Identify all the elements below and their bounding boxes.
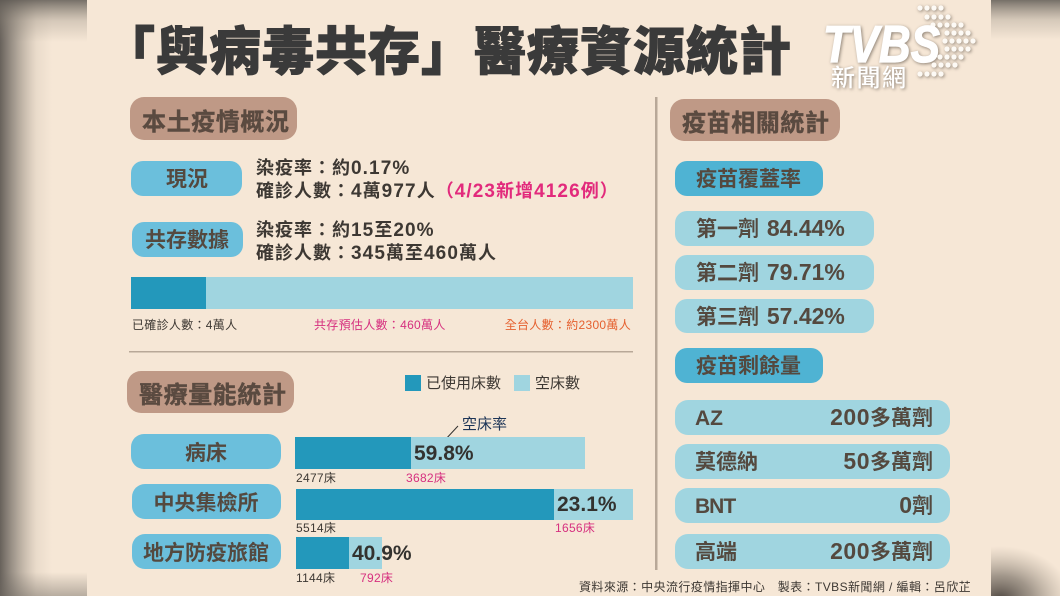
status text: 染疫率：約0.17% bbox=[256, 157, 410, 179]
row: local quarantine hotels: 1144床 bbox=[296, 571, 335, 585]
row: local quarantine hotels: 地方防疫旅館 bbox=[143, 541, 269, 565]
logo wordmark: TVBS bbox=[823, 16, 940, 74]
dose 1 coverage: 第一劑 84.44% bbox=[696, 215, 845, 241]
row: hospital beds: 病床 bbox=[185, 441, 227, 465]
row: local quarantine hotels bbox=[132, 534, 412, 585]
coexistence text bbox=[256, 219, 497, 264]
title: 「與病毒共存」醫療資源統計 bbox=[103, 10, 792, 85]
heading: medical capacity: 醫療量能統計 bbox=[139, 382, 287, 409]
Medigen stock bbox=[675, 534, 950, 569]
logo: TVBS news bbox=[823, 5, 976, 93]
coexistence text: 確診人數：345萬至460萬人 bbox=[256, 242, 497, 264]
BNT stock bbox=[675, 488, 950, 523]
AZ stock: 200多萬劑 bbox=[830, 404, 933, 430]
Medigen stock: 高端 bbox=[695, 540, 737, 564]
status label bbox=[131, 161, 242, 196]
panel: local epidemic overview bbox=[130, 97, 633, 332]
status text bbox=[256, 157, 619, 202]
row: hospital beds: 2477床 bbox=[296, 471, 336, 485]
Moderna stock bbox=[675, 444, 950, 479]
row: local quarantine hotels: 792床 bbox=[360, 571, 393, 585]
Moderna stock: 50多萬劑 bbox=[843, 448, 933, 474]
legend bbox=[405, 375, 580, 392]
Medigen stock: 200多萬劑 bbox=[830, 538, 933, 564]
dose 3 coverage bbox=[675, 299, 874, 333]
row: central quarantine centres: 5514床 bbox=[296, 521, 336, 535]
row: local quarantine hotels: 40.9% bbox=[352, 542, 412, 565]
AZ stock bbox=[675, 400, 950, 435]
source footer: 資料來源：中央流行疫情指揮中心 製表：TVBS新聞網 / 編輯：呂欣芷 bbox=[579, 579, 971, 594]
bar caption: projected: 共存預估人數：460萬人 bbox=[314, 318, 446, 332]
row: hospital beds: 3682床 bbox=[406, 471, 446, 485]
status label: 現況 bbox=[166, 168, 208, 191]
dose 2 coverage: 第二劑 79.71% bbox=[696, 259, 845, 285]
dose 2 coverage bbox=[675, 255, 874, 290]
subheading: coverage: 疫苗覆蓋率 bbox=[696, 168, 801, 191]
heading: medical capacity bbox=[127, 371, 294, 413]
legend: 空床數 bbox=[535, 375, 580, 392]
row: central quarantine centres bbox=[132, 484, 633, 535]
subheading: coverage bbox=[675, 161, 823, 196]
dose 3 coverage: 第三劑 57.42% bbox=[696, 303, 845, 329]
coexistence label: 共存數據 bbox=[145, 229, 229, 252]
BNT stock: BNT bbox=[695, 495, 736, 518]
logo dots arrow bbox=[917, 5, 976, 77]
legend: 已使用床數 bbox=[426, 375, 501, 392]
subheading: remaining: 疫苗剩餘量 bbox=[696, 354, 801, 378]
subheading: remaining bbox=[675, 348, 823, 383]
status text: 確診人數：4萬977人（4/23新增4126例） bbox=[256, 180, 619, 202]
panel: vaccine statistics bbox=[670, 99, 950, 569]
heading: vaccine stats bbox=[670, 99, 840, 141]
right blurred margin bbox=[991, 0, 1060, 596]
heading: vaccine stats: 疫苗相關統計 bbox=[682, 110, 830, 137]
heading: local epidemic bbox=[130, 97, 297, 140]
callout: vacancy rate bbox=[444, 416, 507, 440]
Moderna stock: 莫德納 bbox=[695, 451, 758, 474]
left blurred margin bbox=[0, 0, 87, 596]
logo subtitle: 新聞網 bbox=[831, 58, 908, 93]
row: hospital beds bbox=[131, 434, 585, 485]
bar caption: confirmed: 已確診人數：4萬人 bbox=[132, 317, 237, 332]
callout: vacancy rate: 空床率 bbox=[462, 416, 507, 433]
heading: local epidemic: 本土疫情概況 bbox=[142, 109, 290, 136]
row: central quarantine centres: 1656床 bbox=[555, 521, 595, 535]
row: central quarantine centres: 23.1% bbox=[557, 493, 617, 516]
row: central quarantine centres: 中央集檢所 bbox=[154, 491, 258, 515]
row: hospital beds: 59.8% bbox=[414, 442, 474, 465]
BNT stock: 0劑 bbox=[899, 492, 933, 518]
coexistence label bbox=[132, 222, 243, 257]
bar caption: population: 全台人數：約2300萬人 bbox=[505, 317, 631, 332]
panel: medical capacity bbox=[127, 371, 633, 585]
coexistence text: 染疫率：約15至20% bbox=[256, 219, 435, 241]
dose 1 coverage bbox=[675, 211, 874, 246]
AZ stock: AZ bbox=[695, 407, 723, 430]
population bar bbox=[131, 277, 633, 309]
